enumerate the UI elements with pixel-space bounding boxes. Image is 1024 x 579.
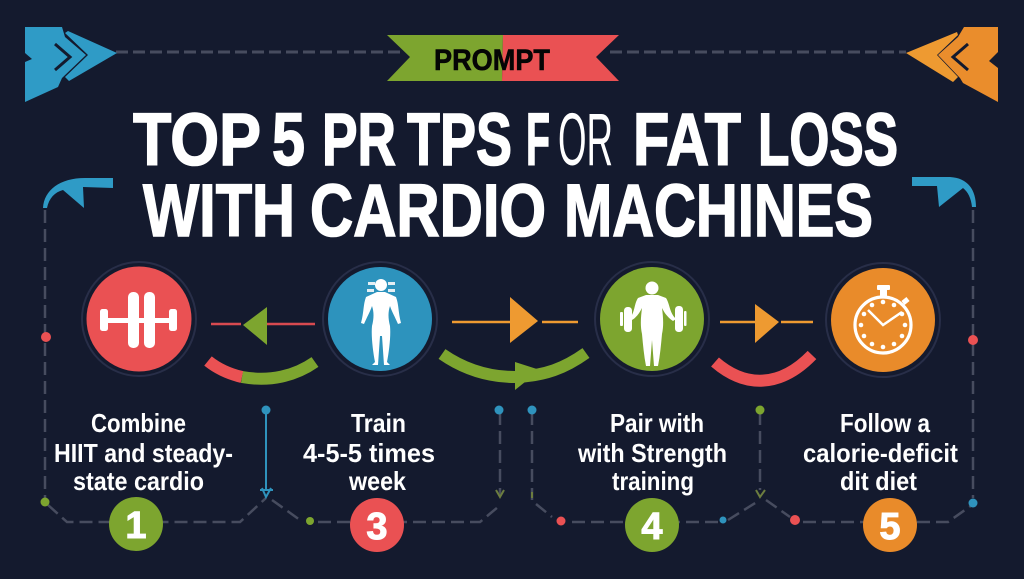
icon circle: dumbbell: [82, 262, 196, 376]
arrow: orange right one: [452, 297, 578, 343]
icon circle: strength figure: [595, 262, 709, 376]
arc: red: [715, 355, 812, 381]
step text: combine: [54, 408, 233, 496]
title: TOP: [133, 98, 261, 181]
step text: follow: dit diet: [840, 466, 917, 496]
number badge 3: [350, 498, 404, 552]
step text: pair: training: [612, 466, 694, 496]
icon circle: body: [323, 262, 437, 376]
banner: prompt ribbon: PROMPT: [434, 44, 550, 77]
step text: combine: state cardio: [73, 466, 204, 496]
icon: right corner hook: [912, 177, 976, 207]
arc: red and green: [208, 361, 315, 379]
step text: combine: Combine: [91, 408, 186, 438]
number badge 5: 5: [879, 506, 901, 548]
arrow: green left: [211, 307, 315, 345]
banner: prompt ribbon: [387, 35, 619, 81]
dashed path network: [45, 210, 973, 522]
icon: orange corner arrow: [906, 27, 998, 102]
number badge 3: 3: [366, 506, 388, 548]
step text: pair: [577, 408, 727, 496]
title: OR: [558, 98, 613, 181]
step text: follow: Follow a: [840, 408, 930, 438]
arrow: orange right two: [720, 304, 813, 343]
step text: follow: calorie-deficit: [803, 438, 958, 468]
step text: pair: with Strength: [577, 438, 727, 468]
title: WITH: [143, 169, 295, 252]
title: PR: [322, 98, 396, 181]
arc: green with arrowhead: [442, 353, 586, 390]
title: MACHINES: [564, 169, 873, 252]
title: FAT: [633, 98, 741, 181]
step text: follow: [803, 408, 958, 496]
top dashed connector lines: [116, 50, 906, 54]
title: TPS: [407, 98, 512, 181]
icon: left corner hook: [43, 178, 113, 208]
title: CARDIO: [310, 169, 546, 252]
step text: train: Train: [351, 408, 406, 438]
icon circle: stopwatch: [826, 263, 940, 377]
number badge 1: [109, 497, 163, 551]
icon: blue corner arrow: [25, 27, 117, 102]
title: 5: [272, 98, 305, 181]
step text: combine: HIIT and steady-: [54, 438, 233, 468]
blue pointer arrow: [260, 412, 273, 497]
number badge 1: 1: [125, 505, 147, 547]
path markers: [40, 332, 978, 526]
step text: train: 4-5-5 times: [303, 438, 435, 468]
step text: train: [303, 408, 435, 496]
title: F: [526, 98, 550, 181]
number badge 4: [625, 498, 679, 552]
step text: train: week: [348, 466, 406, 496]
title: LOSS: [758, 98, 898, 181]
title: [133, 98, 898, 252]
number badge 4: 4: [641, 506, 663, 548]
step text: pair: Pair with: [610, 408, 704, 438]
number badge 5: [863, 498, 917, 552]
